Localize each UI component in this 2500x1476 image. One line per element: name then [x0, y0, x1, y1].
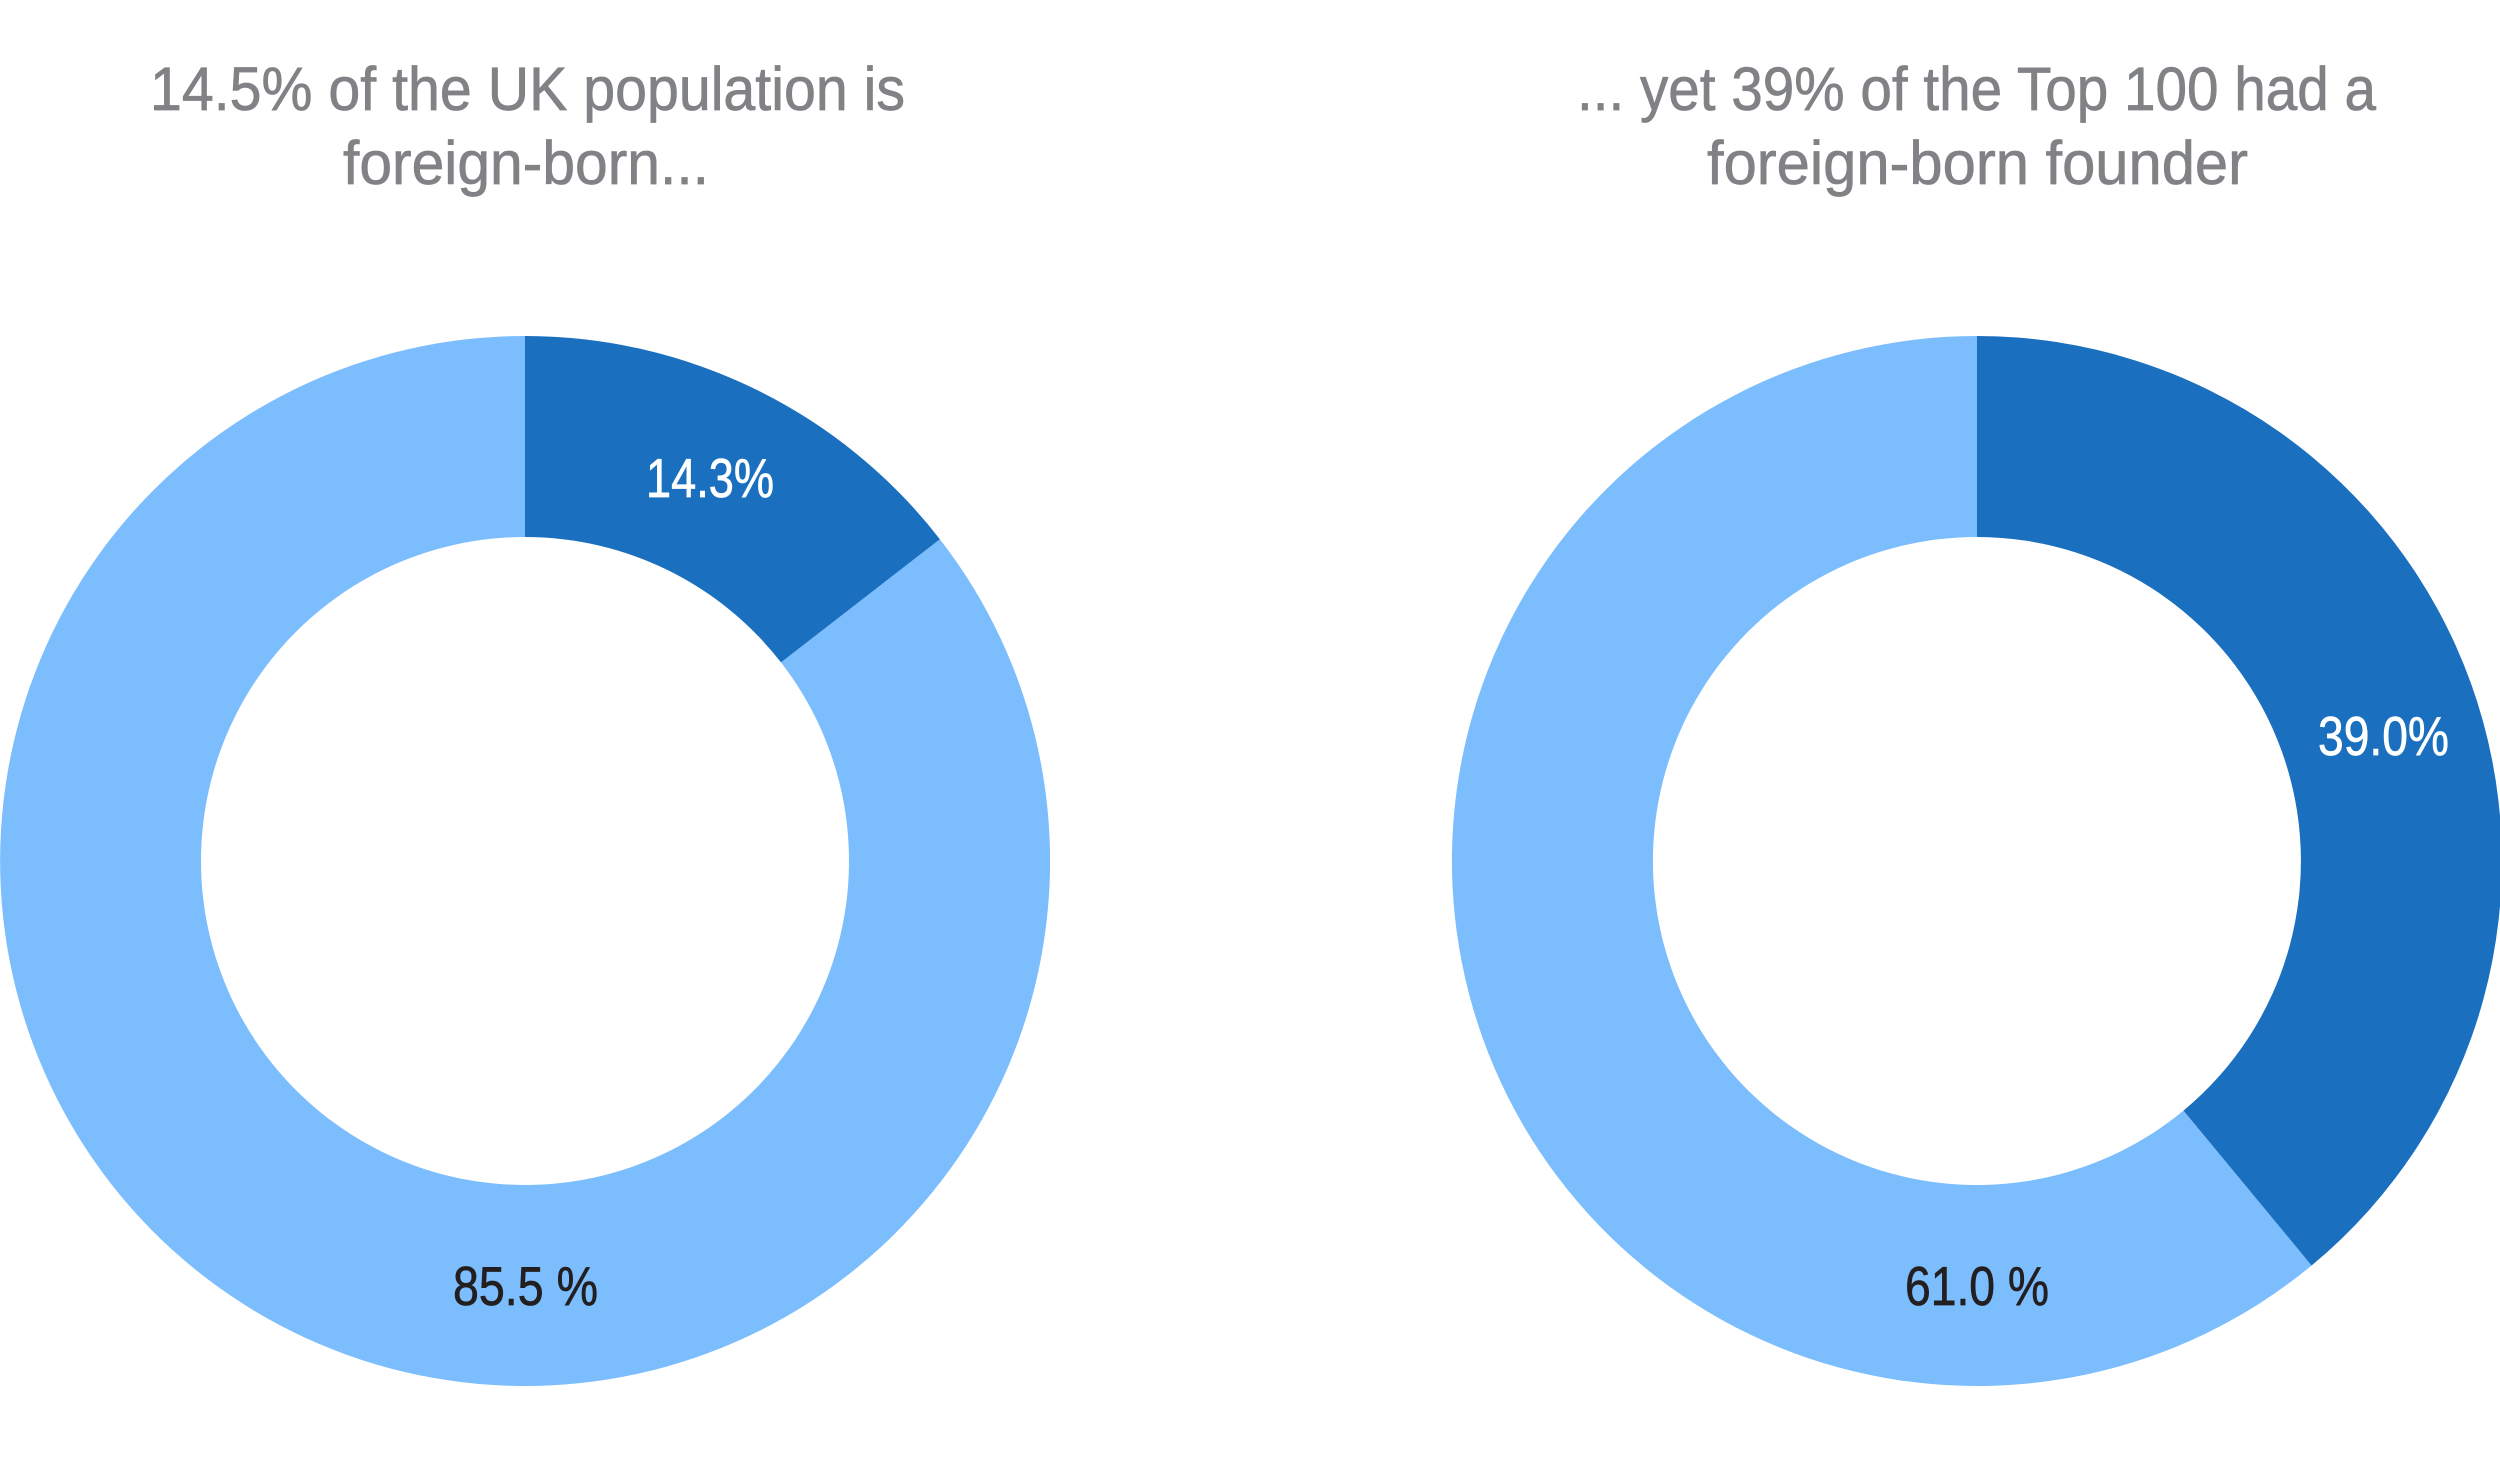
heading: Top 100 founders: [1577, 55, 2376, 197]
segment: foreign-born 14.3%: [525, 336, 940, 662]
value label: 39.0%: 39.0%: [2318, 705, 2449, 767]
heading: UK population: 14.5% of the UK population is: [150, 55, 905, 123]
value label: 14.3%: 14.3%: [646, 447, 774, 509]
donut chart: UK population: [0, 336, 1050, 1386]
donut chart: Top 100 founders: [1452, 336, 2500, 1386]
panel: Top 100 founders: [1452, 55, 2500, 1386]
segment: other 85.5%: [0, 336, 1050, 1386]
value label: 85.5 %: 85.5 %: [453, 1255, 598, 1317]
value label: 61.0 %: 61.0 %: [1905, 1255, 2049, 1317]
heading: Top 100 founders: foreign-born founder: [1707, 129, 2248, 197]
segment: foreign-born founder 39.0%: [1977, 336, 2500, 1266]
heading: Top 100 founders: ... yet 39% of the Top 100 had a: [1577, 55, 2376, 123]
heading: UK population: [150, 55, 905, 197]
segment: other 61.0%: [1452, 336, 2312, 1386]
heading: UK population: foreign-born...: [343, 129, 709, 197]
panel: UK population: [0, 55, 1050, 1386]
